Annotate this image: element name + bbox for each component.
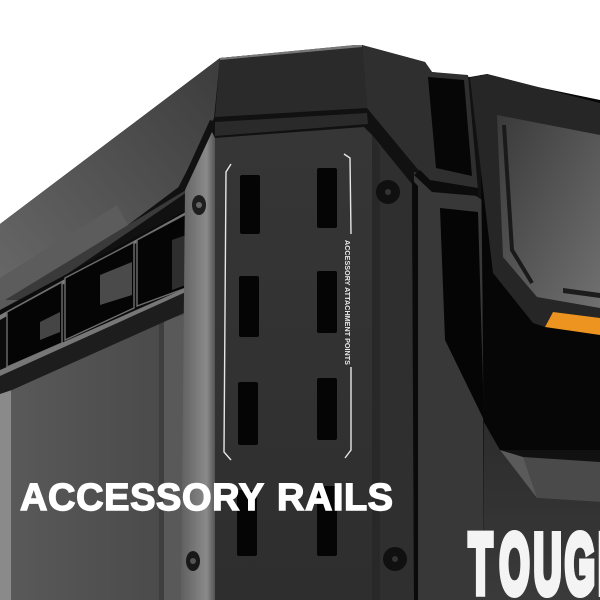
left top face of box [0, 58, 220, 320]
top corner cap [215, 45, 430, 172]
lid [470, 74, 600, 327]
right body column [412, 172, 600, 600]
title: RAILS [277, 477, 394, 519]
orange latch accent [545, 312, 600, 335]
rail slots [237, 168, 337, 556]
screws [186, 180, 407, 571]
slanted shade on rail edge [372, 135, 380, 600]
upper handle block [414, 62, 478, 196]
title: ACCESSORY [20, 477, 265, 519]
accessory rail panel [215, 127, 372, 600]
handle slots on left side [0, 210, 186, 394]
right bevel of rail [368, 130, 414, 600]
rail label: ACCESSORY ATTACHMENT POINTS [343, 240, 352, 365]
recess lower bevel [500, 450, 600, 502]
side panel below handle [0, 300, 186, 600]
black recess under lid [480, 75, 600, 450]
side strip [181, 132, 215, 600]
bracket lines [224, 154, 351, 460]
